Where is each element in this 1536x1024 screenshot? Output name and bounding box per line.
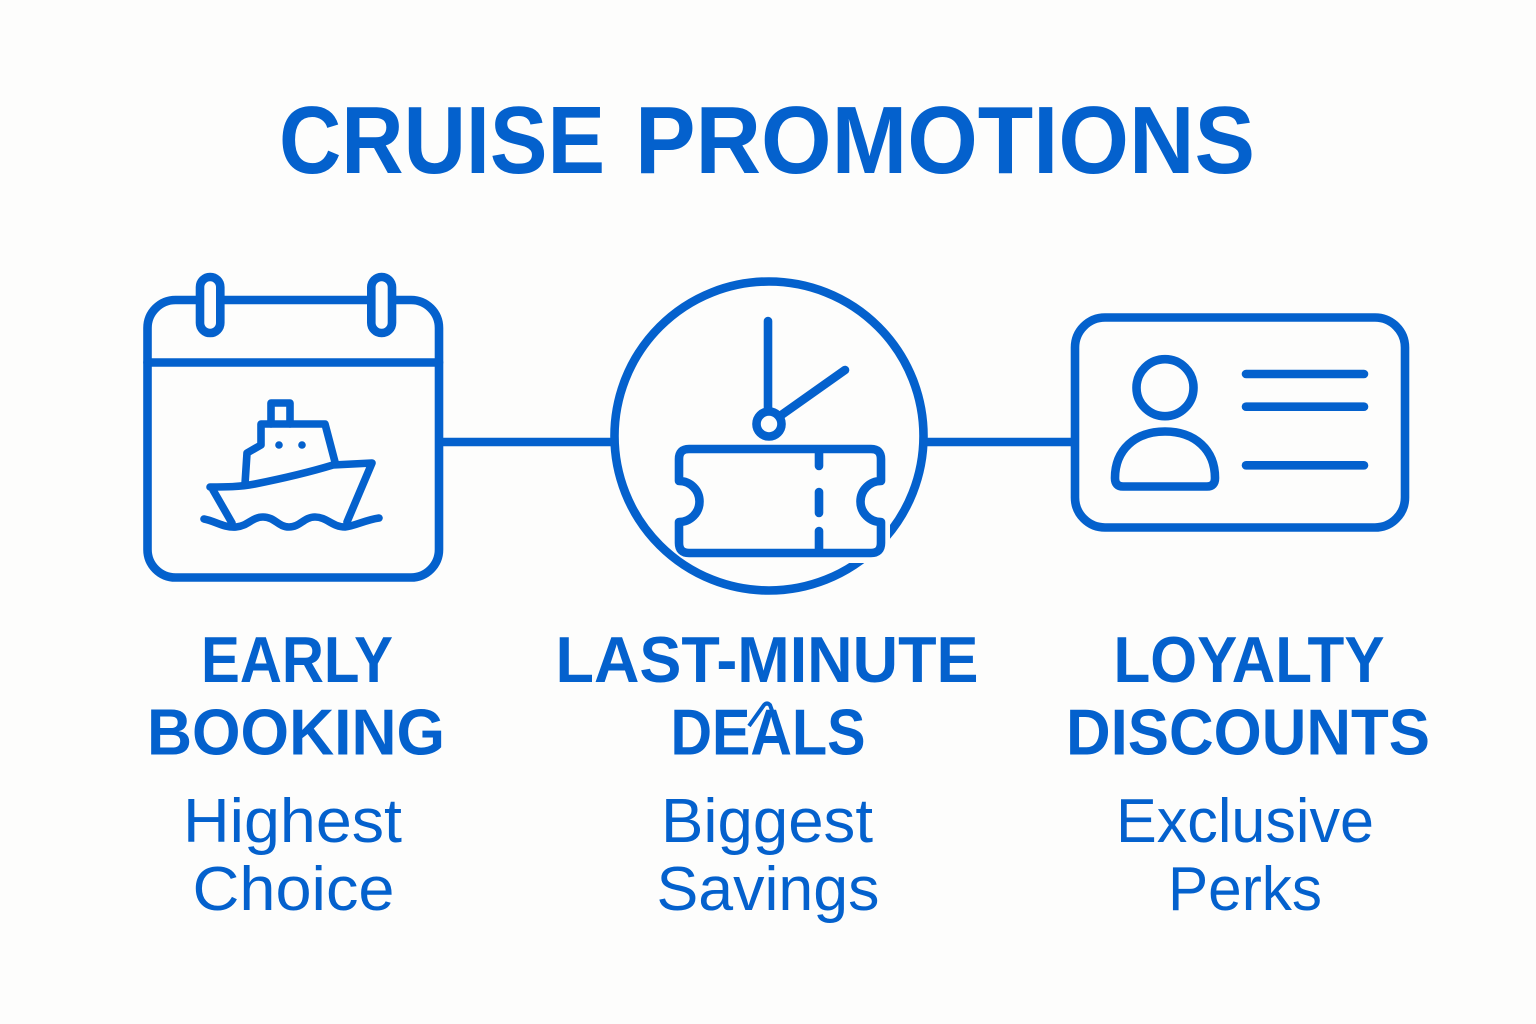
heading: loyalty discounts: LOYALTY	[1114, 623, 1384, 696]
text: biggest savings	[656, 787, 880, 924]
icon: loyalty member card	[1075, 318, 1405, 528]
connector: clock to card	[924, 438, 1075, 446]
text: biggest savings: Biggest	[661, 787, 873, 856]
heading: last-minute deals: LAST-MINUTE	[556, 623, 978, 696]
text: exclusive perks	[1116, 787, 1374, 924]
heading: loyalty discounts	[1066, 623, 1430, 768]
text: highest choice: Choice	[192, 855, 394, 924]
title: PROMOTIONS	[635, 87, 1255, 194]
text: highest choice	[183, 787, 402, 924]
text: highest choice: Highest	[183, 787, 402, 856]
heading: early booking: EARLY	[201, 623, 393, 696]
heading: early booking	[147, 623, 445, 768]
title	[279, 87, 1255, 194]
title: CRUISE	[279, 87, 605, 194]
heading: last-minute deals: DEALS	[670, 696, 866, 768]
text: exclusive perks: Exclusive	[1116, 787, 1374, 856]
heading: loyalty discounts: DISCOUNTS	[1066, 696, 1430, 768]
heading: early booking: BOOKING	[147, 696, 445, 768]
icon: calendar with ship	[148, 277, 439, 578]
icon: clock with ticket	[614, 282, 924, 590]
heading: last-minute deals	[556, 623, 978, 768]
connector: calendar to clock	[439, 438, 614, 446]
text: exclusive perks: Perks	[1168, 855, 1322, 924]
text: biggest savings: Savings	[656, 855, 880, 924]
